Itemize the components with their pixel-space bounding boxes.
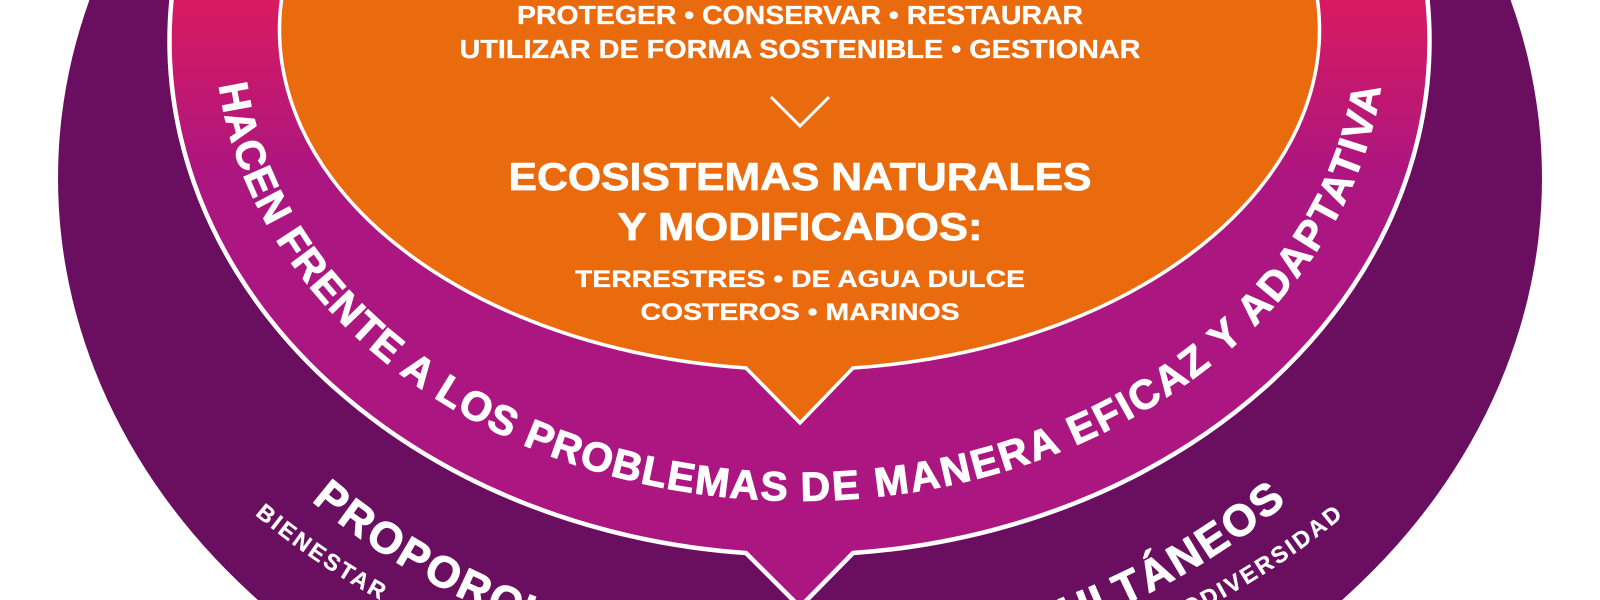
panel: orange speech bubble <box>280 0 1320 423</box>
heading: ecosystems line 1: ECOSISTEMAS NATURALES <box>508 156 1092 199</box>
text: ecosystem types line 1: TERRESTRES • DE AGUA DULCE <box>575 266 1025 293</box>
text: ecosystem types line 2: COSTEROS • MARINOS <box>640 299 960 326</box>
icon: chevron arrow <box>771 97 829 126</box>
text: actions line 2: UTILIZAR DE FORMA SOSTENIBLE • GESTIONAR <box>460 36 1140 64</box>
panel: pink speech bubble <box>169 0 1429 600</box>
heading: ecosystems line 2: Y MODIFICADOS: <box>618 206 982 249</box>
text: actions line 1: PROTEGER • CONSERVAR • RESTAURAR <box>517 2 1083 30</box>
curved text: pink ring: HACEN FRENTE A LOS PROBLEMAS DE MANERA EFICAZ Y ADAPTATIVA <box>218 82 1382 502</box>
